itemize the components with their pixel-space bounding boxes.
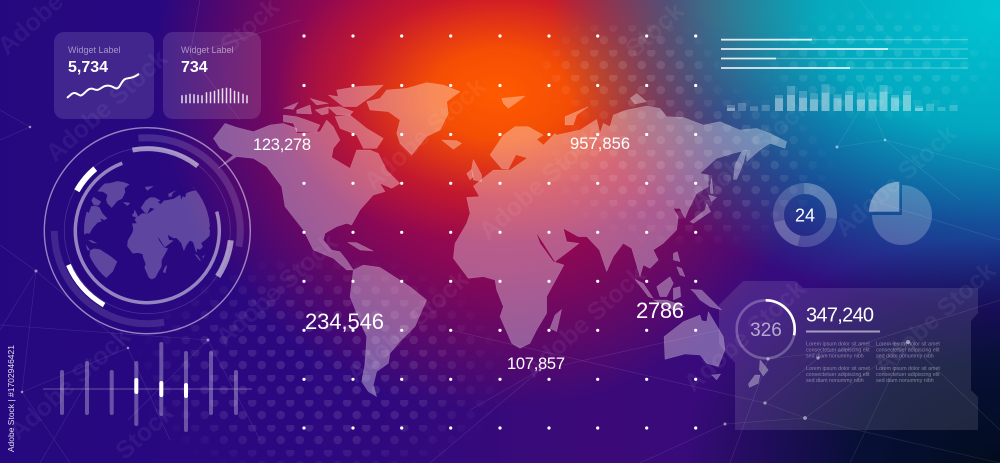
stock watermarks: Adobe Stock: [474, 122, 606, 246]
label: Asia Pacific value: 2786: [636, 298, 684, 323]
HUD rings: [29, 113, 265, 349]
stock watermarks: Adobe Stock: [41, 44, 173, 168]
label: Africa value: 107,857: [507, 355, 565, 373]
lorem copy: bottom left: Lorem ipsum dolor sit amet: [806, 366, 870, 372]
lorem copy: top right: [876, 341, 940, 359]
bar chart: [727, 84, 958, 111]
sparkline: [68, 74, 138, 97]
widget: line trend: [54, 32, 154, 119]
lorem copy: bottom right: Lorem ipsum dolor sit amet: [876, 366, 940, 372]
pie chart: [869, 182, 932, 245]
lorem copy: bottom left: consectetuer adipiscing elit: [806, 372, 870, 378]
stock watermarks: Adobe Stock: [830, 119, 962, 243]
slider chart: [43, 344, 252, 430]
donut value: 24: [795, 206, 815, 226]
widget: bar trend: [163, 32, 261, 119]
lorem copy: top right: sed diam nonummy nibh: [876, 353, 934, 359]
halftone dot field: [164, 14, 986, 463]
lorem copy: bottom right: consectetuer adipiscing elit: [876, 372, 940, 378]
info panel: [719, 281, 978, 430]
mini bars: [182, 88, 247, 103]
underline: [806, 330, 880, 332]
lorem copy: top right: consectetuer adipiscing elit: [876, 347, 940, 353]
widget value: 734: [181, 59, 208, 76]
ring value: 326: [750, 320, 782, 341]
progress ring: [737, 300, 795, 358]
widget label: Widget Label: [68, 45, 121, 55]
image id: Adobe Stock | #1702946421: [6, 345, 16, 452]
lorem copy: bottom right: sed diam nonummy nibh: [876, 378, 934, 384]
widget value: 5,734: [68, 59, 108, 76]
lorem copy: top right: Lorem ipsum dolor sit amet: [876, 341, 940, 347]
stock watermarks: Adobe Stock: [869, 256, 1000, 380]
label: South America value: 234,546: [305, 309, 384, 334]
stock watermarks: Adobe Stock: [4, 322, 136, 446]
pie wedge: [869, 182, 899, 212]
lorem copy: bottom right: [876, 366, 940, 384]
map value labels: [253, 135, 684, 373]
lorem copy: top left: [806, 341, 870, 359]
stock watermarks: Adobe Stock: [679, 274, 811, 398]
grid of white dots: [304, 36, 696, 428]
lorem copy: bottom left: sed diam nonummy nibh: [806, 378, 864, 384]
widget label: Widget Label: [181, 45, 234, 55]
world map: [213, 83, 787, 397]
lorem copy: top left: consectetuer adipiscing elit: [806, 347, 870, 353]
label: Europe Asia value: 957,856: [570, 135, 630, 153]
slider handles: [136, 380, 186, 396]
lorem copy: top left: sed diam nonummy nibh: [806, 353, 864, 359]
HUD globe: [44, 127, 251, 334]
stock watermarks: Adobe Stock: [211, 228, 343, 352]
stock watermarks: Adobe Stock: [519, 260, 651, 384]
stock watermarks: Adobe Stock: [359, 72, 491, 196]
stock watermarks: Adobe Stock: [684, 92, 816, 216]
lorem copy: top left: Lorem ipsum dolor sit amet: [806, 341, 870, 347]
panel value: 347,240: [806, 305, 874, 327]
donut chart: [773, 183, 837, 247]
progress lines: [721, 40, 968, 68]
lorem copy: bottom left: [806, 366, 870, 384]
globe map: [84, 181, 210, 280]
slider tracks: [62, 344, 236, 430]
stock watermarks: Adobe Stock: [342, 265, 474, 389]
label: North America value: 123,278: [253, 136, 311, 154]
